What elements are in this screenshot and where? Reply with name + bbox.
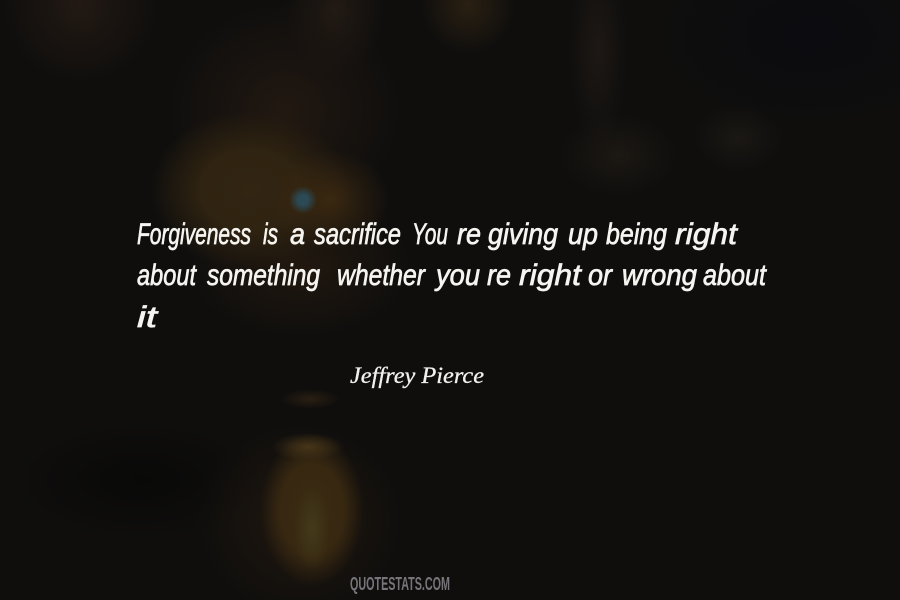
quote line 2: you <box>434 259 480 292</box>
quote line 2: whether <box>337 259 426 292</box>
quote line 2: wrong <box>622 259 697 292</box>
quote line 1: is <box>263 218 278 251</box>
quote line 1: up <box>568 218 598 251</box>
quote line 2: or <box>588 259 613 292</box>
quote line 2: something <box>207 259 320 292</box>
quote line 2: right <box>519 259 583 292</box>
quote line 2: about <box>703 259 767 292</box>
quote line 3: it <box>137 301 159 334</box>
quote line 2 <box>137 259 767 292</box>
watermark: QUOTESTATS.COM <box>350 574 450 594</box>
quote line 1: right <box>675 218 739 251</box>
quote line 1: giving <box>488 218 558 251</box>
quote line 1 <box>137 218 739 251</box>
author name: Jeffrey Pierce <box>350 363 484 388</box>
quote line 1: a <box>290 218 305 251</box>
quote line 1: being <box>606 218 667 251</box>
quote line 1: re <box>457 218 481 251</box>
quote line 2: about <box>137 259 197 292</box>
quote line 1: sacrifice <box>314 218 401 251</box>
quote line 1: Forgiveness <box>137 218 251 251</box>
quote line 2: re <box>487 259 511 292</box>
quote line 1: You <box>412 218 448 251</box>
